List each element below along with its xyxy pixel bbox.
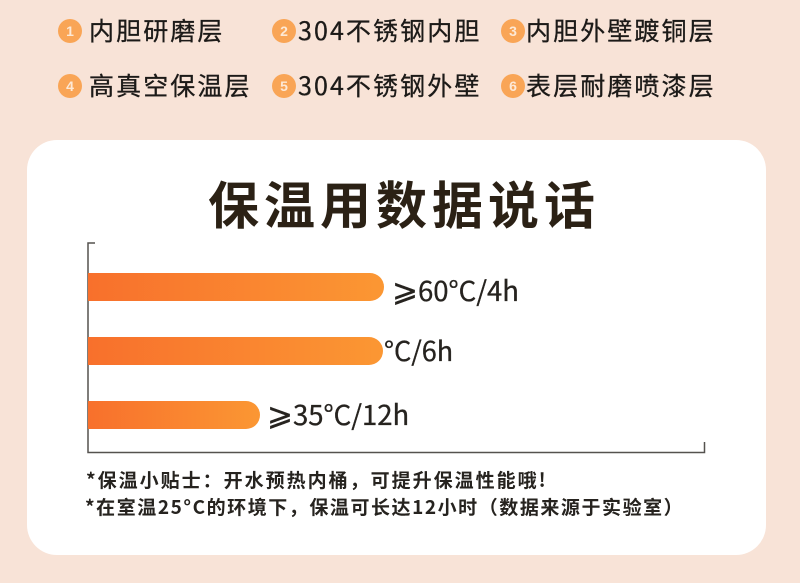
bar: 6h: [88, 337, 383, 365]
panel: insulation data card: [27, 140, 766, 555]
bar label: 6h: °C/6h: [384, 330, 453, 369]
note line 1: *保温小贴士：开水预热内桶，可提升保温性能哦!: [86, 466, 548, 493]
bar chart: [87, 242, 706, 454]
heading: 保温用数据说话: [208, 165, 600, 239]
note line 2: *在室温25°C的环境下，保温可长达12小时（数据来源于实验室）: [85, 493, 684, 520]
legend: item 6: 6: [509, 78, 517, 94]
legend: item 2: 2: [280, 23, 288, 39]
legend: item 4: 高真空保温层: [89, 67, 252, 103]
legend: item 1: 1: [66, 23, 74, 39]
legend: item 4: 4: [66, 78, 74, 94]
bar label: 35°C 12h: ⩾35°C/12h: [267, 389, 409, 434]
legend: item 3: 3: [509, 23, 517, 39]
legend: item 6: 表层耐磨喷漆层: [526, 67, 716, 103]
bar: 35°C 12h: [88, 401, 260, 429]
chart axes: [87, 242, 706, 454]
legend: item 5: 304不锈钢外壁: [298, 67, 481, 103]
legend: item 2: 304不锈钢内胆: [298, 12, 481, 48]
legend: item 1: 内胆研磨层: [89, 12, 225, 48]
bar label: 60°C 4h: ⩾60°C/4h: [392, 265, 519, 310]
legend: item 5: 5: [280, 78, 288, 94]
bar: 60°C 4h: [88, 273, 384, 301]
legend: item 3: 内胆外壁踱铜层: [526, 12, 716, 48]
